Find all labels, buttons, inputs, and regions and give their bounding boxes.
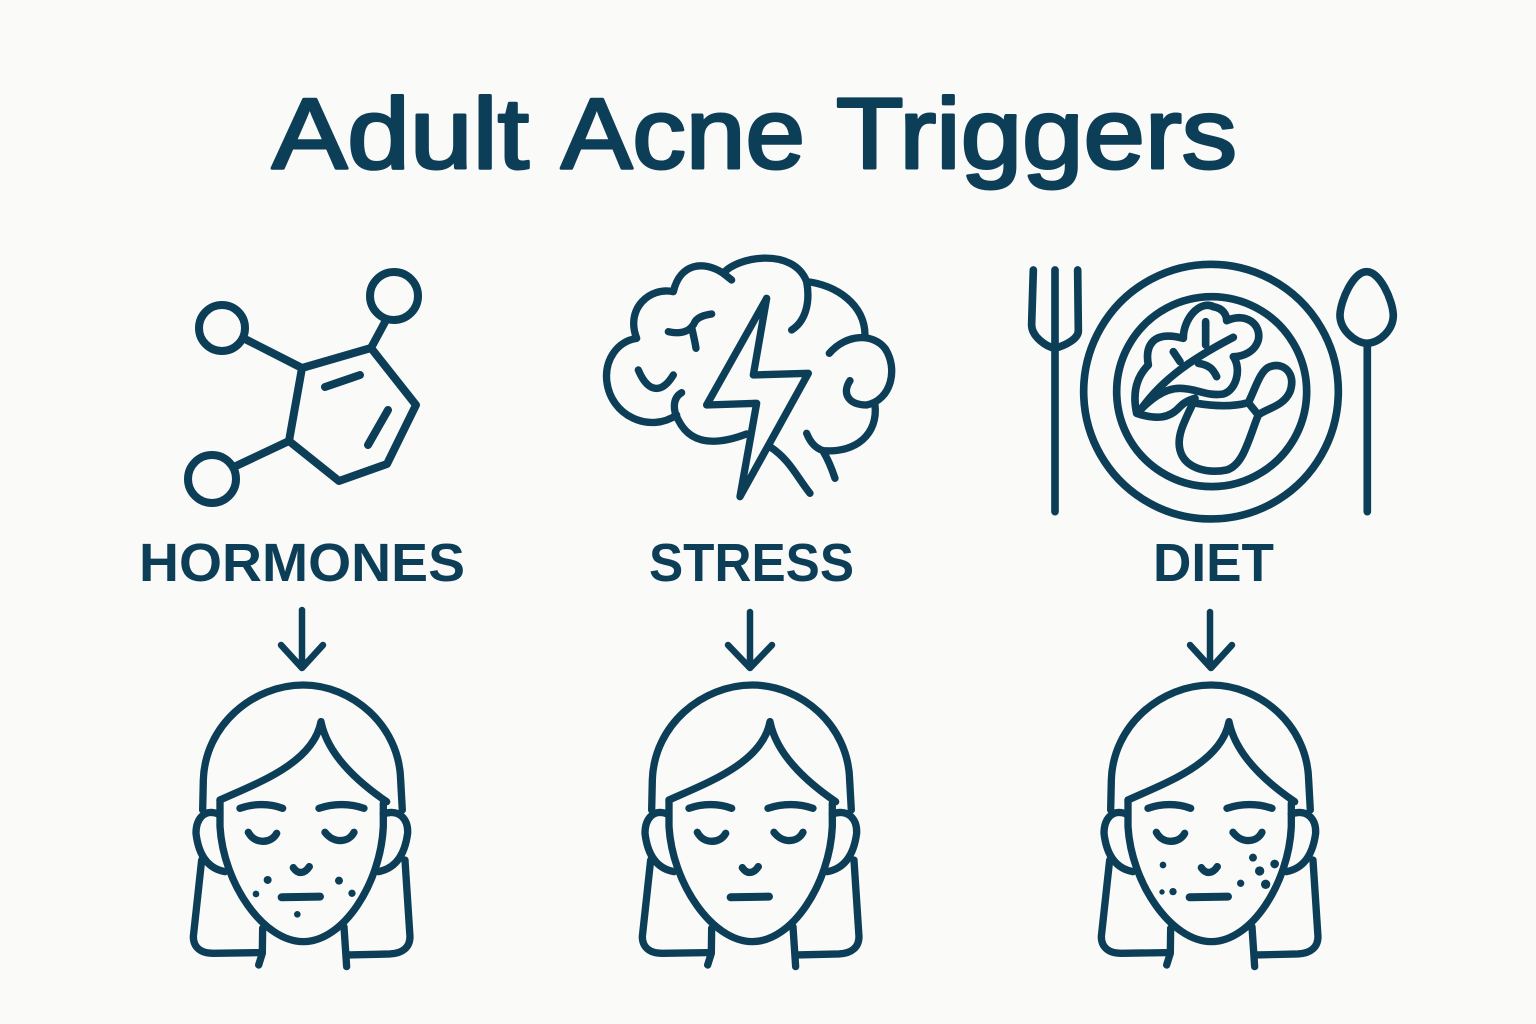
face: stress outcome: [642, 685, 859, 967]
icon: brain with lightning bolt: [607, 258, 892, 497]
icon: plate with fork and spoon: [1032, 264, 1393, 519]
face: diet outcome: [1101, 685, 1318, 967]
icon: fork: [1032, 270, 1078, 512]
arrow: stress to face: [728, 612, 772, 668]
face: hormones outcome: [193, 685, 410, 967]
acne spots: [1159, 854, 1279, 895]
heading: diet: DIET: [1153, 533, 1274, 593]
acne spots: [253, 876, 356, 918]
arrow: hormones to face: [281, 610, 323, 668]
icon: leaf and food: [1135, 305, 1259, 417]
heading: stress: STRESS: [649, 533, 854, 593]
icon: plate rings: [1084, 264, 1338, 519]
title: Adult: [272, 78, 529, 190]
title: Acne: [561, 78, 805, 190]
title: [272, 78, 1237, 190]
icon: hormone molecule: [188, 272, 418, 503]
heading: hormones: HORMONES: [139, 533, 465, 593]
arrow: diet to face: [1190, 612, 1232, 668]
title: Triggers: [836, 78, 1237, 190]
icon: spoon: [1340, 272, 1393, 512]
